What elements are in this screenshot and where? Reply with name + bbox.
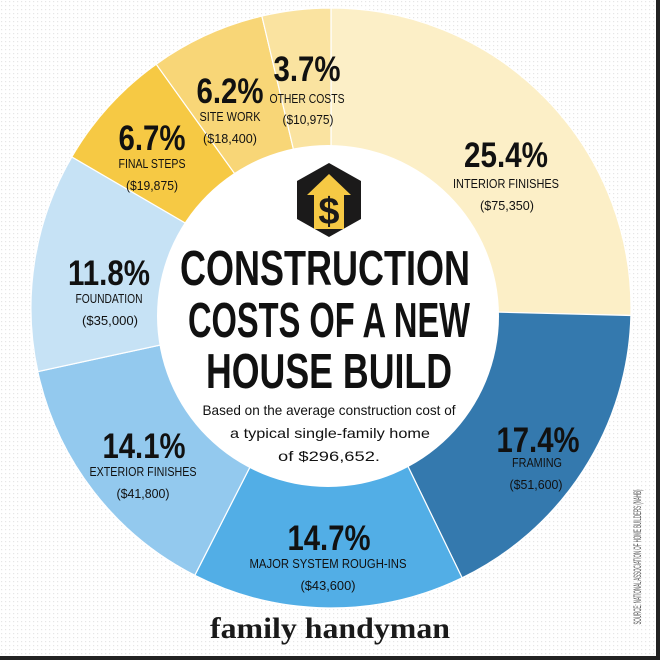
title: CONSTRUCTION <box>180 242 470 296</box>
segment: final steps <box>72 64 331 308</box>
subtitle text: of $296,652. <box>278 448 380 464</box>
label: exterior finishes: EXTERIOR FINISHES <box>90 464 197 479</box>
title: COSTS OF A NEW <box>188 294 470 348</box>
label: final steps <box>118 119 186 193</box>
label: other costs: 3.7% <box>274 50 340 89</box>
label: major system rough-ins: 14.7% <box>288 519 370 558</box>
label: exterior finishes: 14.1% <box>102 427 186 466</box>
label: final steps: FINAL STEPS <box>118 156 186 171</box>
segment: exterior finishes <box>38 308 331 575</box>
label: interior finishes: ($75,350) <box>480 198 534 213</box>
segment: framing <box>331 308 631 578</box>
label: other costs: OTHER COSTS <box>270 91 345 106</box>
segment: other costs <box>262 8 331 308</box>
label: foundation: ($35,000) <box>82 313 138 328</box>
label: exterior finishes <box>90 427 197 501</box>
icon: house dollar hexagon <box>297 163 361 237</box>
label: site work: 6.2% <box>196 72 264 111</box>
label: other costs: ($10,975) <box>282 112 334 127</box>
label: final steps: ($19,875) <box>126 178 178 193</box>
label: framing: 17.4% <box>496 421 580 460</box>
label: site work <box>196 72 264 146</box>
title: HOUSE BUILD <box>206 345 452 399</box>
title <box>180 242 470 399</box>
label: foundation <box>68 254 150 328</box>
segment: foundation <box>31 157 331 372</box>
label: other costs <box>270 50 345 127</box>
segment: major system rough-ins <box>195 308 462 608</box>
label: major system rough-ins <box>250 519 407 593</box>
segment: interior finishes <box>331 8 631 316</box>
label: major system rough-ins: MAJOR SYSTEM ROUGH-INS <box>250 556 407 571</box>
label: framing: ($51,600) <box>510 477 562 492</box>
label: foundation: 11.8% <box>68 254 150 293</box>
label: site work: SITE WORK <box>200 109 261 124</box>
label: site work: ($18,400) <box>203 131 257 146</box>
label: interior finishes: INTERIOR FINISHES <box>453 176 559 191</box>
segment: site work <box>156 16 331 308</box>
label: framing: FRAMING <box>512 455 562 470</box>
icon: house dollar hexagon: $ <box>318 191 340 233</box>
label: major system rough-ins: ($43,600) <box>300 578 356 593</box>
text: SOURCE: NATIONAL ASSOCIATION OF HOME BUILDERS (NAHB) <box>632 490 644 624</box>
subtitle text: a typical single-family home <box>230 425 430 441</box>
subtitle text: Based on the average construction cost of <box>202 402 456 418</box>
center white circle <box>157 145 499 487</box>
label: final steps: 6.7% <box>118 119 186 158</box>
label: framing <box>496 421 580 492</box>
label: foundation: FOUNDATION <box>76 291 142 306</box>
logo: family handyman: family handyman <box>210 612 450 645</box>
label: interior finishes <box>453 136 559 213</box>
label: interior finishes: 25.4% <box>464 136 548 175</box>
label: exterior finishes: ($41,800) <box>116 486 170 501</box>
subtitle text <box>202 402 456 464</box>
